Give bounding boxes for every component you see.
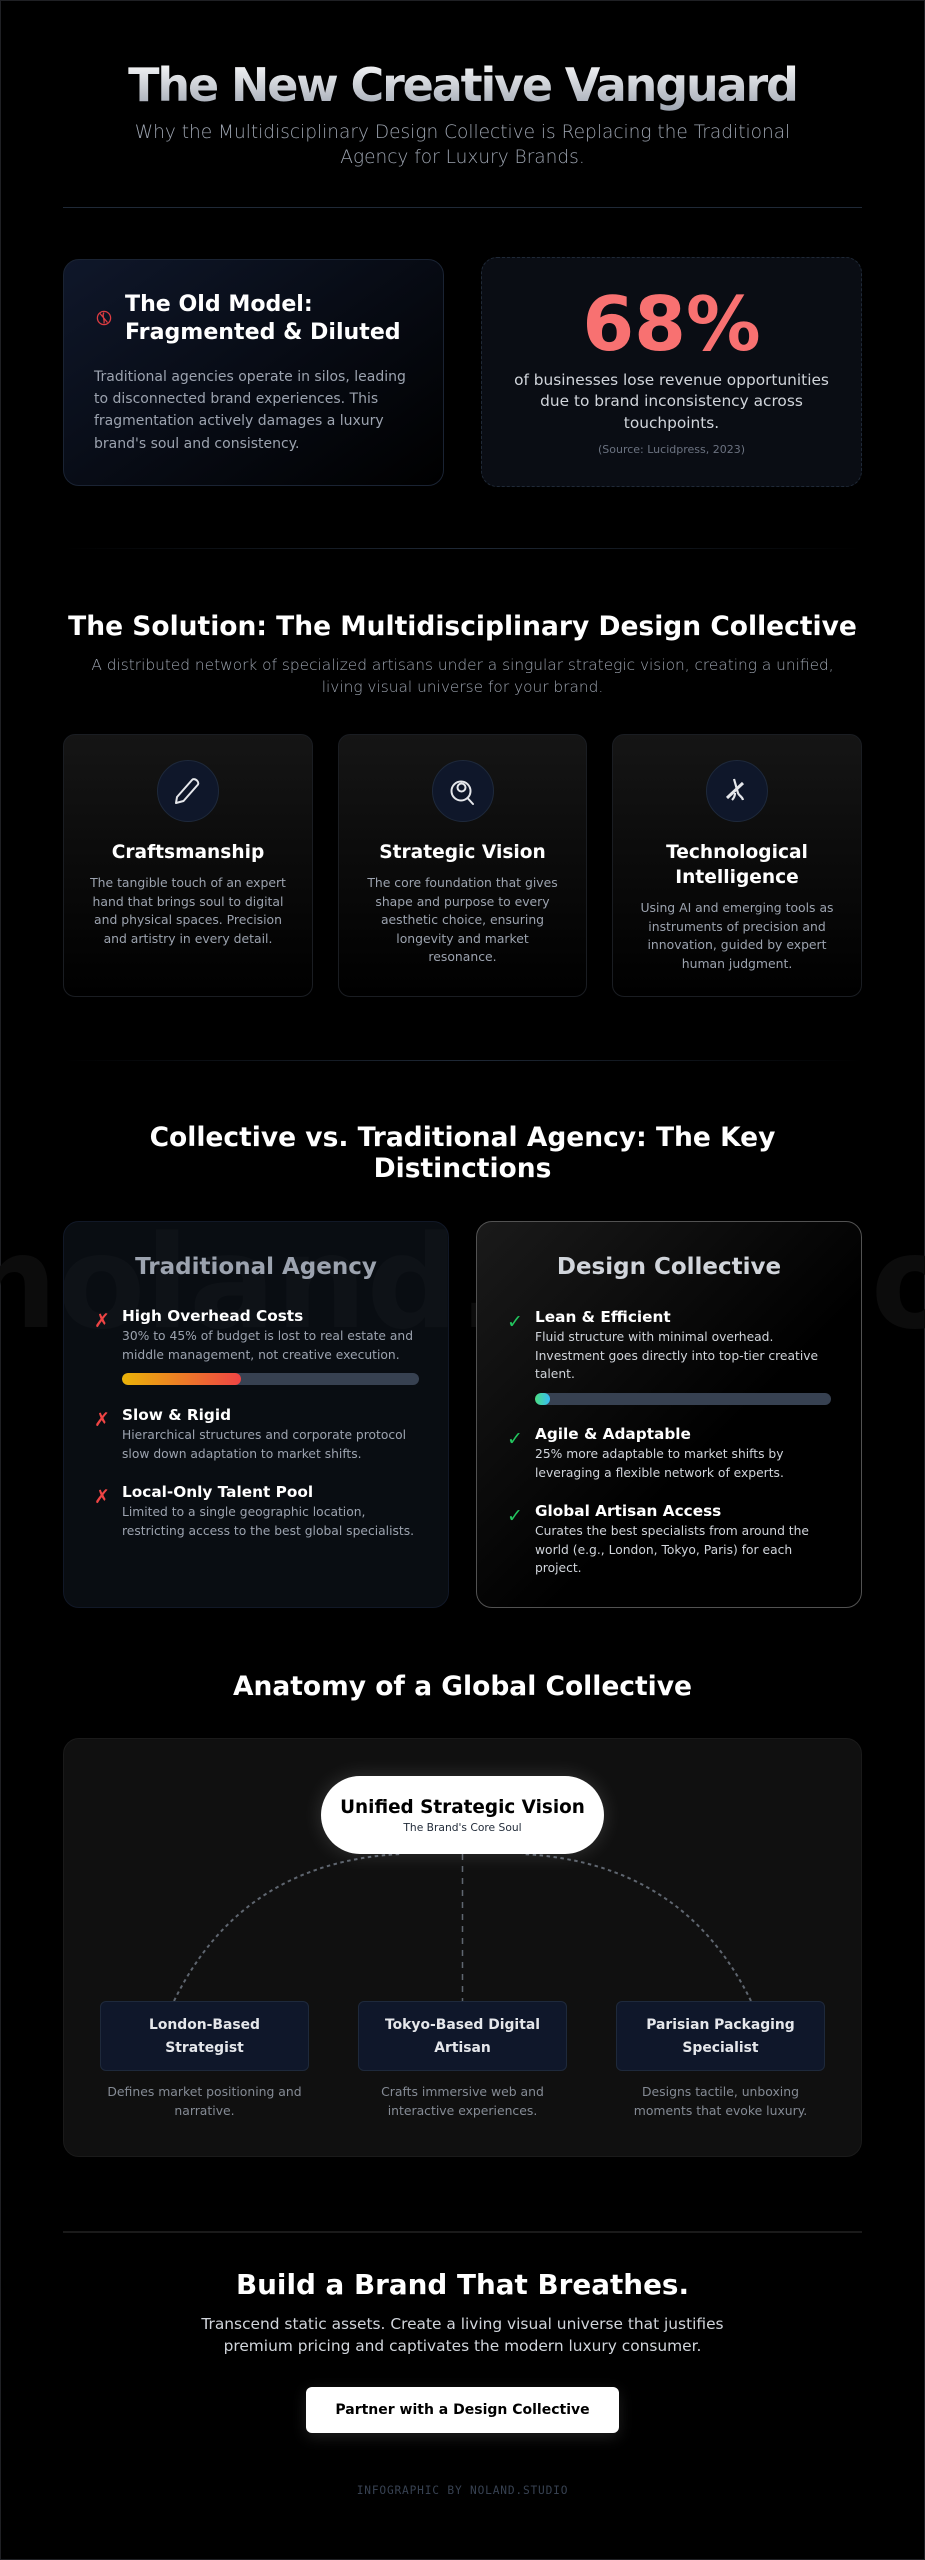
panel heading: Traditional Agency [135,1254,377,1280]
item: agile [507,1425,784,1480]
text: paris: Designs tactile, unboxing [642,2084,799,2099]
icon: cross: ✗ [94,1409,110,1431]
node title: Tokyo-Based Digital [385,2017,540,2033]
panel: craftsmanship [63,734,313,997]
panel heading: Design Collective [557,1254,781,1280]
heading: comparison: Collective vs. Traditional Agency: The Key [150,1122,775,1153]
text: tokyo: Crafts immersive web and [381,2084,544,2099]
item text: project. [535,1561,582,1575]
item text: talent. [535,1367,575,1381]
text: call to action: premium pricing and captivates the modern luxury consumer. [224,2336,701,2354]
heading: call to action: Build a Brand That Breathes. [236,2268,689,2301]
heading: old model [125,291,401,345]
subtitle: Agency for Luxury Brands. [340,147,585,168]
card text: aesthetic choice, ensuring [381,912,544,927]
subtitle [135,122,790,168]
node title [646,2017,795,2056]
text: paris: moments that evoke luxury. [634,2102,807,2118]
card text: shape and purpose to every [375,894,550,908]
item: global [507,1502,809,1575]
icon: check: ✓ [507,1311,523,1333]
item title: Slow & Rigid [122,1406,231,1424]
item text: Fluid structure with minimal overhead. [535,1330,773,1344]
node subtitle: The Brand's Core Soul [403,1821,522,1834]
card text [367,875,558,964]
item text: Limited to a single geographic location, [122,1505,365,1519]
item: high overhead [94,1307,419,1385]
text: paris [634,2084,807,2118]
heading: old model: The Old Model: [125,291,313,317]
node title: Parisian Packaging [646,2017,795,2033]
text: old model: to disconnected brand experiences. This [94,391,378,407]
icon: check: ✓ [507,1505,523,1527]
item text: leveraging a flexible network of experts. [535,1466,784,1480]
text: call to action [201,2315,724,2354]
item text: Curates the best specialists from around the [535,1524,809,1538]
stat number: 68% [582,281,761,368]
panel: traditional agency [63,1221,449,1608]
node title: Artisan [434,2040,491,2056]
node: paris [616,2001,825,2071]
stat text [514,370,829,432]
stat text: touchpoints. [624,414,719,432]
node title: Strategist [165,2040,244,2056]
card title: Craftsmanship [112,842,264,863]
item: lean [507,1308,831,1405]
item text [535,1524,809,1575]
footer credit: INFOGRAPHIC BY NOLAND.STUDIO [357,2484,568,2497]
panel: technological intelligence [612,734,862,997]
card text [640,900,834,970]
item title: Global Artisan Access [535,1502,721,1520]
button [306,2387,619,2433]
stat text: of businesses lose revenue opportunities [514,370,829,388]
stat text: due to brand inconsistency across [540,392,803,410]
card text [90,875,286,946]
item text: slow down adaptation to market shifts. [122,1446,362,1460]
item text [122,1428,406,1460]
card text: Using AI and emerging tools as [640,900,834,915]
item text [122,1329,413,1362]
item title: High Overhead Costs [122,1307,303,1325]
text: call to action: Transcend static assets. Create a living visual universe that justifies [201,2315,724,2333]
subheading: solution: living visual universe for your brand. [322,678,603,696]
item text: world (e.g., London, Tokyo, Paris) for each [535,1542,792,1556]
card title: Strategic Vision [379,842,546,863]
item text [535,1330,818,1381]
heading: comparison: Distinctions [374,1153,551,1184]
text: tokyo [381,2084,544,2118]
icon: pencil [157,760,219,822]
icon: check: ✓ [507,1428,523,1450]
source: (Source: Lucidpress, 2023) [598,443,745,456]
item: slow and rigid [94,1406,406,1460]
item: local talent [94,1483,414,1538]
card text: innovation, guided by expert [647,937,827,952]
item title: Agile & Adaptable [535,1425,691,1443]
item text [122,1505,414,1538]
text: old model: brand's soul and consistency. [94,436,299,452]
panel: anatomy diagram [63,1738,862,2157]
icon: crossed tools [706,760,768,822]
heading: old model: Fragmented & Diluted [125,319,401,345]
item text: Investment goes directly into top-tier creative [535,1348,818,1362]
item text: restricting access to the best global specialists. [122,1524,414,1538]
item text: 30% to 45% of budget is lost to real estate and [122,1329,413,1343]
card text: The core foundation that gives [367,875,558,890]
card text: instruments of precision and [648,918,826,934]
card title: Intelligence [675,867,799,888]
subheading: solution: A distributed network of specialized artisans under a singular strategic vision, creating a unified, [91,656,834,674]
card text: hand that brings soul to digital [93,894,283,908]
card text: and physical spaces. Precision [94,912,282,927]
node: unified vision [321,1776,604,1854]
node title [385,2017,540,2056]
card text: and artistry in every detail. [104,930,272,946]
text: london [107,2084,302,2118]
node: tokyo [358,2001,567,2071]
subheading: solution [91,656,834,696]
text: old model: Traditional agencies operate in silos, leading [94,368,406,384]
heading: solution: The Solution: The Multidisciplinary Design Collective [68,611,857,642]
panel: design collective [476,1221,862,1608]
node: london [100,2001,309,2071]
item title: Local-Only Talent Pool [122,1483,313,1501]
item text: 25% more adaptable to market shifts by [535,1447,784,1461]
item title: Lean & Efficient [535,1308,671,1326]
panel: strategic vision [338,734,587,997]
subtitle: Why the Multidisciplinary Design Collective is Replacing the Traditional [135,122,790,143]
progress bar [535,1393,831,1405]
item text: middle management, not creative execution. [122,1348,400,1362]
button: Partner with a Design Collective [335,2402,590,2418]
item text [535,1447,784,1480]
card text: human judgment. [682,956,792,970]
panel: statistic [481,257,862,487]
icon: cross: ✗ [94,1486,110,1508]
card text: The tangible touch of an expert [90,875,286,890]
node title: Unified Strategic Vision [340,1797,585,1818]
panel: old model [63,259,444,486]
item text: Hierarchical structures and corporate protocol [122,1428,406,1442]
icon: cross: ✗ [94,1310,110,1332]
icon: prohibited [96,310,112,326]
text: old model [94,368,406,452]
icon: magnifier [432,760,494,822]
text: london: Defines market positioning and [107,2084,302,2099]
node title: Specialist [682,2040,759,2056]
card text: resonance. [428,949,497,964]
card title [666,842,808,888]
card title: Technological [666,842,808,863]
text: old model: fragmentation actively damages a luxury [94,413,384,429]
node title: London-Based [149,2017,260,2033]
text: london: narrative. [174,2102,235,2118]
heading: anatomy: Anatomy of a Global Collective [233,1671,692,1702]
heading: comparison [150,1122,775,1184]
progress bar [122,1373,419,1385]
card text: longevity and market [396,930,529,946]
node title [149,2017,260,2056]
text: tokyo: interactive experiences. [388,2102,537,2118]
title: The New Creative Vanguard [128,58,797,112]
